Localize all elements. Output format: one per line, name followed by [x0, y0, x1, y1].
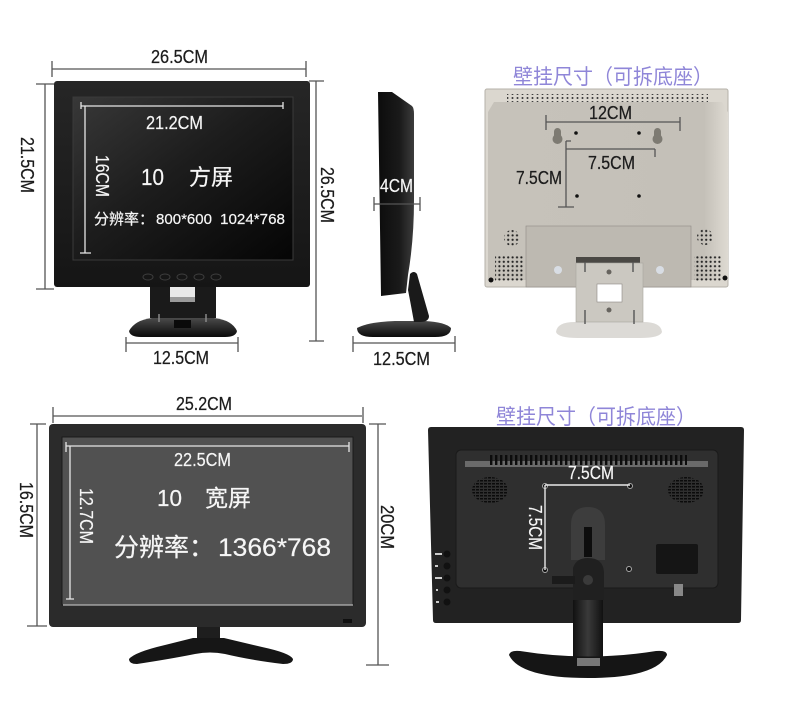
label: vertical VESA: 7.5CM [516, 168, 562, 188]
rear vents [488, 455, 687, 465]
panel: side view [353, 92, 455, 369]
label: resolution: 1024*768 [220, 211, 285, 228]
panel: widescreen monitor front [16, 394, 397, 665]
back body [485, 89, 728, 287]
screen width dimension [66, 442, 349, 452]
label: resolution: 800*600 [156, 211, 212, 228]
label: body height: 21.5CM [17, 137, 37, 193]
title: 壁挂尺寸（可拆底座） [513, 66, 713, 89]
monitor body [54, 81, 310, 287]
label: resolution: 分辨率： [94, 211, 154, 228]
wide screen [62, 437, 353, 605]
label: square screen: 方屏 [189, 165, 233, 190]
dimension: total height [309, 81, 324, 341]
dimension: overall width [52, 61, 306, 77]
dimension: base width [126, 337, 238, 352]
label: screen height: 12.7CM [76, 488, 96, 544]
rear label plate [656, 544, 698, 574]
vent dots [507, 94, 708, 102]
keyholes [552, 128, 662, 144]
dimension: vertical VESA [558, 141, 574, 207]
back recessed panel [488, 102, 728, 280]
rear stand [509, 507, 667, 678]
rear speakers [472, 477, 704, 503]
dimension: horizontal VESA [545, 484, 630, 486]
screen height dimension [66, 446, 74, 599]
label: total height: 26.5CM [317, 167, 337, 223]
rear top strip [465, 461, 708, 467]
rear body [428, 427, 744, 623]
dimension: body height [27, 424, 47, 626]
speaker holes [504, 229, 713, 246]
label: overall width: 26.5CM [151, 47, 208, 67]
wide stand [129, 626, 293, 664]
screen width dimension [81, 102, 283, 109]
label: 12cm: 12CM [589, 103, 632, 123]
panel: square monitor back [485, 66, 728, 338]
back base [556, 322, 662, 338]
label: screen height: 16CM [92, 155, 112, 197]
label: overall width: 25.2CM [176, 394, 232, 414]
label: vertical VESA: 7.5CM [525, 505, 545, 550]
dimension: 12cm [546, 115, 680, 131]
label: horizontal VESA: 7.5CM [568, 463, 614, 483]
monitor buttons [143, 274, 221, 280]
lower dot grids [488, 256, 728, 282]
title: 壁挂尺寸（可拆底座） [496, 406, 696, 429]
panel: square monitor front [17, 47, 337, 368]
connector [674, 584, 683, 596]
mount holes [574, 131, 641, 198]
screen reflection [63, 604, 353, 606]
label: base width: 12.5CM [153, 348, 209, 368]
lower plate [526, 226, 691, 287]
rear mount holes [542, 484, 632, 572]
dimension: vertical VESA [544, 485, 546, 570]
label: body height: 16.5CM [16, 482, 36, 538]
label: screen width: 21.2CM [146, 113, 203, 133]
dimension: total height [366, 424, 389, 665]
label: screen width: 22.5CM [174, 450, 231, 470]
thickness dimension [374, 197, 420, 211]
label: thickness: 4CM [380, 176, 413, 196]
monitor stand [129, 286, 237, 337]
label: side base: 12.5CM [373, 349, 430, 369]
wide body [49, 424, 366, 627]
dimension: side base [353, 336, 455, 352]
label: resolution: 1366*768 [218, 534, 331, 562]
panel: widescreen monitor back [428, 406, 744, 678]
label: wide screen: 宽屏 [205, 485, 251, 511]
label: resolution: 分辨率： [114, 534, 214, 562]
dimension: body height [36, 84, 54, 289]
label: horizontal VESA: 7.5CM [588, 153, 635, 173]
rear raised housing [456, 450, 718, 588]
side stand [357, 272, 451, 337]
dimension: horizontal VESA [566, 149, 655, 157]
wide logo [343, 619, 352, 623]
dimension: overall width [53, 407, 363, 423]
side body [378, 92, 414, 296]
label: total height: 20CM [377, 505, 397, 549]
label: size: 10 [157, 485, 182, 511]
label: size: 10 [141, 164, 164, 190]
side buttons [435, 550, 450, 606]
bracket [554, 257, 664, 324]
monitor screen [73, 97, 293, 260]
screen height dimension [80, 106, 91, 253]
